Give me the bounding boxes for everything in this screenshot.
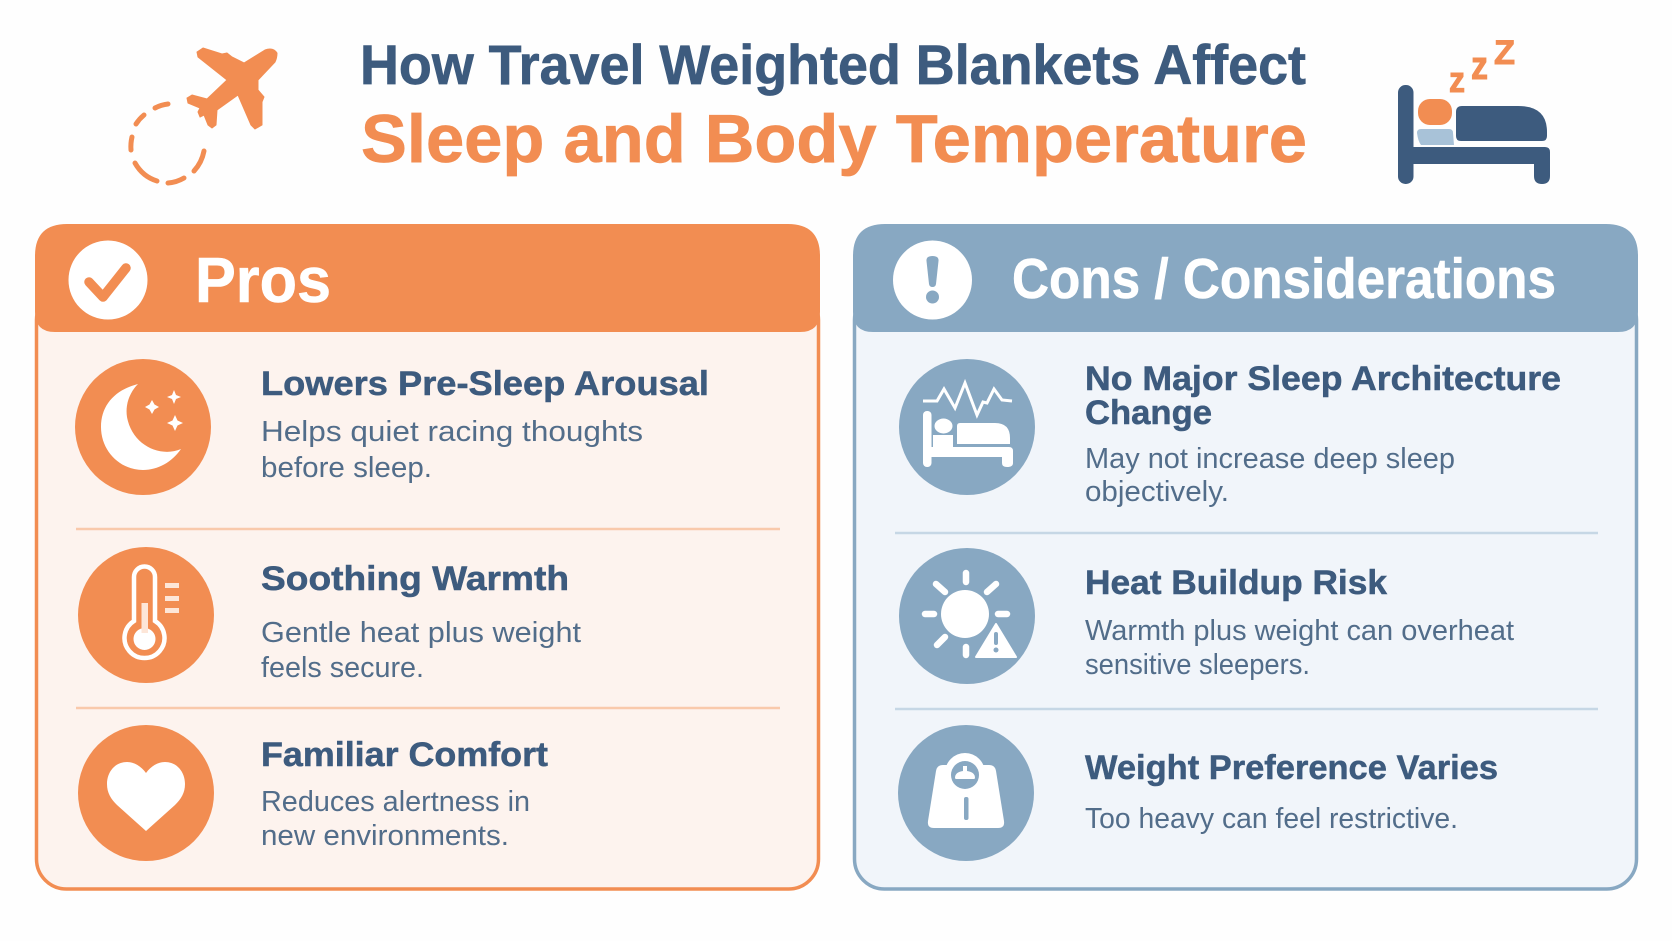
item: weight preference varies (1085, 749, 1498, 835)
item: weight preference varies: Too heavy can feel restrictive. (1085, 803, 1458, 835)
item: lowers pre-sleep arousal: before sleep. (261, 452, 432, 484)
panel header: pros (35, 224, 820, 332)
item: weight preference varies: Weight Preference Varies (1085, 749, 1498, 787)
item: soothing warmth: Soothing Warmth (261, 560, 569, 598)
item: no major sleep architecture change: Change (1085, 394, 1212, 432)
item: familiar comfort (261, 736, 548, 852)
item: heat buildup risk: sensitive sleepers. (1085, 649, 1310, 681)
panel: cons (853, 224, 1638, 889)
item: heat buildup risk: Warmth plus weight can overheat (1085, 615, 1514, 647)
item: lowers pre-sleep arousal (261, 365, 709, 484)
panel: pros (35, 224, 820, 889)
item: no major sleep architecture change: No Major Sleep Architecture (1085, 360, 1561, 398)
title: Sleep and Body Temperature (361, 101, 1307, 177)
icon: airplane with dashed loop (131, 48, 277, 183)
icon: bed with sleep wave (899, 359, 1035, 495)
item: soothing warmth (261, 560, 581, 684)
icon: sun with warning (899, 548, 1035, 684)
panel body: pros (36, 290, 818, 889)
item: heat buildup risk (1085, 564, 1514, 681)
item: no major sleep architecture change (1085, 360, 1561, 508)
icon: exclamation (893, 240, 972, 320)
icon: thermometer (78, 547, 214, 683)
item: no major sleep architecture change: May not increase deep sleep (1085, 443, 1455, 475)
title (360, 33, 1307, 177)
item: familiar comfort: Familiar Comfort (261, 736, 548, 774)
icon: bed with zzz: z (1471, 44, 1488, 88)
item: familiar comfort: new environments. (261, 820, 509, 852)
panel header: cons (853, 224, 1638, 332)
item: heat buildup risk: Heat Buildup Risk (1085, 564, 1387, 602)
icon: check mark (68, 240, 148, 320)
item: soothing warmth: Gentle heat plus weight (261, 617, 581, 649)
heading: cons: Cons / Considerations (1012, 247, 1556, 311)
item: lowers pre-sleep arousal: Lowers Pre-Sleep Arousal (261, 365, 709, 403)
icon: moon and stars (75, 359, 211, 495)
icon: bed with zzz: z (1449, 59, 1465, 100)
icon: bed with zzz: Z (1494, 34, 1515, 72)
icon: weighing scale (898, 725, 1034, 861)
item: no major sleep architecture change: objectively. (1085, 476, 1229, 508)
title: How Travel Weighted Blankets Affect (360, 33, 1306, 96)
icon: bed with zzz (1398, 34, 1550, 184)
heading: pros: Pros (195, 244, 331, 316)
item: lowers pre-sleep arousal: Helps quiet racing thoughts (261, 416, 643, 448)
item: familiar comfort: Reduces alertness in (261, 786, 530, 818)
icon: heart (78, 725, 214, 861)
item: soothing warmth: feels secure. (261, 652, 424, 684)
panel body: cons (854, 290, 1636, 889)
